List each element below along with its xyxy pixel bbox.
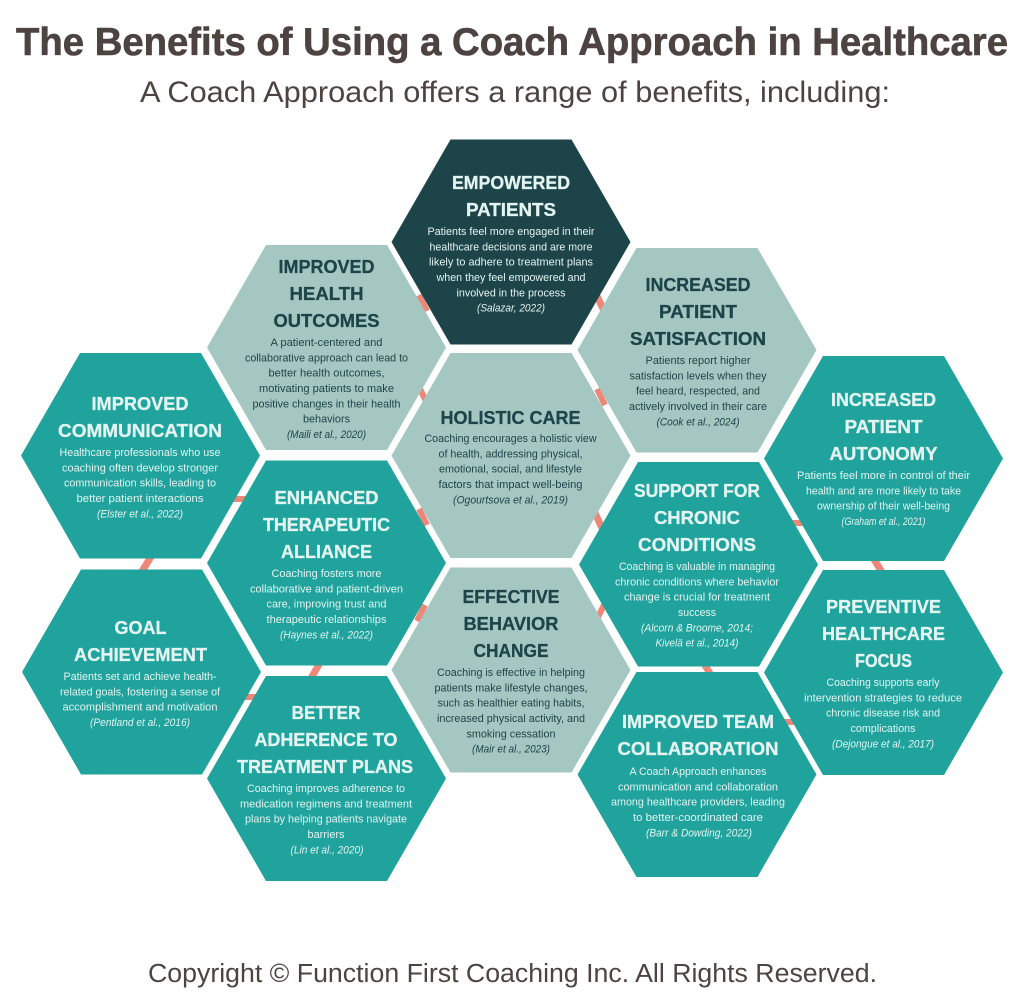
description: Coaching supports early [826, 677, 940, 689]
heading [274, 256, 380, 331]
description: Coaching fosters more [272, 568, 382, 580]
heading: EMPOWERED [452, 172, 570, 193]
panel: enhanced therapeutic alliance [207, 460, 446, 666]
heading [237, 702, 413, 777]
description: satisfaction levels when they [630, 370, 767, 382]
description: increased physical activity, and [437, 713, 585, 725]
panel: increased patient satisfaction [578, 248, 816, 452]
panel: improved communication [21, 353, 260, 558]
description [428, 226, 595, 315]
heading: PATIENT [659, 301, 738, 322]
heading: ENHANCED [274, 487, 378, 508]
description: barriers [308, 829, 345, 841]
description [60, 447, 220, 520]
description: Patients set and achieve health- [64, 671, 217, 683]
heading: COLLABORATION [618, 738, 778, 759]
description: change is crucial for treatment [624, 592, 770, 604]
description: complications [850, 723, 916, 735]
description: (Cook et al., 2024) [656, 416, 740, 428]
heading [822, 596, 945, 671]
description: communication skills, leading to [64, 478, 216, 490]
description: (Salazar, 2022) [477, 303, 545, 315]
hexagon background [207, 460, 446, 666]
description: of health, addressing physical, [438, 448, 582, 460]
description: Coaching is effective in helping [437, 667, 585, 679]
heading: FOCUS [855, 650, 912, 671]
heading [452, 172, 570, 220]
heading: IMPROVED TEAM [622, 711, 774, 732]
hexagon background [22, 570, 261, 774]
description: A Coach Approach enhances [630, 766, 767, 778]
heading: CHRONIC [654, 507, 740, 528]
heading: PREVENTIVE [826, 596, 941, 617]
hexagon background [579, 462, 818, 666]
description: care, improving trust and [266, 599, 386, 611]
hexagon background [578, 248, 816, 452]
hexagon background [207, 676, 446, 881]
description [240, 783, 412, 856]
heading [263, 487, 390, 562]
description: to better-coordinated care [633, 812, 763, 824]
hexagon background [764, 356, 1003, 561]
heading: HOLISTIC CARE [440, 407, 580, 428]
description [250, 568, 403, 641]
description: (Haynes et al., 2022) [280, 629, 373, 641]
panel: support for chronic conditions [579, 462, 818, 666]
description [804, 677, 962, 750]
heading: CONDITIONS [638, 534, 756, 555]
heading [618, 711, 778, 759]
description: smoking cessation [466, 728, 556, 740]
description: (Ogourtsova et al., 2019) [453, 494, 568, 506]
description: (Dejongue et al., 2017) [832, 738, 934, 750]
panel: increased patient autonomy [764, 356, 1003, 561]
description: success [678, 607, 717, 619]
hexagon background [207, 245, 446, 450]
description: plans by helping patients navigate [245, 814, 407, 826]
description: chronic conditions where behavior [615, 576, 779, 588]
description: related goals, fostering a sense of [60, 686, 221, 698]
description: (Pentland et al., 2016) [90, 717, 190, 729]
heading: SATISFACTION [630, 328, 766, 349]
heading: PATIENT [844, 416, 923, 437]
description: ownership of their well-being [817, 501, 950, 513]
description: (Graham et al., 2021) [842, 516, 926, 528]
panel: improved health outcomes [207, 245, 446, 450]
description: therapeutic relationships [266, 614, 387, 626]
description: Patients feel more engaged in their [428, 226, 595, 238]
heading: GOAL [114, 617, 166, 638]
description [424, 433, 597, 506]
description: emotional, social, and lifestyle [439, 464, 582, 476]
heading [630, 274, 766, 349]
heading: COMMUNICATION [58, 420, 222, 441]
hexagon background [392, 568, 630, 772]
heading: ADHERENCE TO [254, 729, 398, 750]
title: The Benefits of Using a Coach Approach in Healthcare [16, 21, 1008, 64]
heading [634, 480, 760, 555]
heading: HEALTHCARE [822, 623, 945, 644]
description: (Elster et al., 2022) [97, 508, 183, 520]
description: health and are more likely to take [806, 485, 961, 497]
description: Kivelä et al., 2014) [656, 638, 738, 650]
heading: THERAPEUTIC [263, 514, 390, 535]
description: better health outcomes, [268, 368, 384, 380]
heading: IMPROVED [92, 393, 188, 414]
description: Patients feel more in control of their [797, 470, 970, 482]
heading [462, 586, 560, 661]
description: involved in the process [456, 287, 566, 299]
description: accomplishment and motivation [62, 702, 218, 714]
description: Healthcare professionals who use [60, 447, 220, 459]
heading: BETTER [292, 702, 360, 723]
heading: BEHAVIOR [464, 613, 558, 634]
heading: AUTONOMY [830, 443, 938, 464]
description: motivating patients to make [259, 383, 394, 395]
heading [74, 617, 208, 665]
description: collaborative and patient-driven [250, 583, 403, 595]
description: healthcare decisions and are more [430, 241, 592, 253]
hexagon background [21, 353, 260, 558]
heading: ALLIANCE [281, 541, 372, 562]
panel: improved team collaboration [578, 672, 816, 877]
heading: TREATMENT PLANS [237, 756, 413, 777]
heading: SUPPORT FOR [634, 480, 760, 501]
hexagon background [392, 140, 630, 344]
description: such as healthier eating habits, [438, 698, 584, 710]
heading: INCREASED [831, 389, 936, 410]
heading: INCREASED [646, 274, 750, 295]
panel: effective behavior change [392, 568, 630, 772]
description: medication regimens and treatment [240, 798, 412, 810]
heading: CHANGE [474, 640, 548, 661]
description: among healthcare providers, leading [611, 797, 785, 809]
description: (Barr & Dowding, 2022) [646, 827, 752, 839]
description [611, 766, 785, 839]
description: A patient-centered and [270, 337, 382, 349]
description: likely to adhere to treatment plans [429, 257, 594, 269]
heading: PATIENTS [466, 199, 556, 220]
panel: preventive healthcare focus [764, 570, 1003, 775]
heading: ACHIEVEMENT [74, 644, 208, 665]
description: intervention strategies to reduce [804, 692, 962, 704]
panel: goal achievement [22, 570, 261, 774]
description: Coaching improves adherence to [247, 783, 405, 795]
hexagon background [392, 353, 630, 558]
heading: IMPROVED [278, 256, 374, 277]
description: Coaching is valuable in managing [619, 561, 775, 573]
hexagon background [578, 672, 816, 877]
description: Coaching encourages a holistic view [424, 433, 597, 445]
hexagon background [764, 570, 1003, 775]
description: actively involved in their care [629, 401, 767, 413]
description: coaching often develop stronger [62, 462, 218, 474]
description: feel heard, respected, and [636, 386, 760, 398]
panel: empowered patients [392, 140, 630, 344]
description [615, 561, 779, 650]
description: communication and collaboration [618, 781, 778, 793]
description: positive changes in their health [252, 398, 400, 410]
heading [830, 389, 938, 464]
description: patients make lifestyle changes, [434, 682, 588, 694]
description: Patients report higher [646, 355, 751, 367]
description [60, 671, 221, 729]
description [629, 355, 767, 428]
description: better patient interactions [76, 493, 204, 505]
description: (Lin et al., 2020) [290, 844, 364, 856]
heading: HEALTH [290, 283, 364, 304]
panel: holistic care [392, 353, 630, 558]
description [245, 337, 408, 441]
subtitle: A Coach Approach offers a range of benefits, including: [140, 76, 890, 109]
description: (Maili et al., 2020) [287, 429, 366, 441]
description: (Mair et al., 2023) [472, 744, 550, 756]
description: (Alcorn & Broome, 2014; [641, 622, 753, 634]
description: collaborative approach can lead to [245, 352, 408, 364]
description: chronic disease risk and [826, 708, 940, 720]
description: when they feel empowered and [436, 272, 586, 284]
description [797, 470, 970, 528]
connector ticks between hexagons [141, 294, 883, 722]
panel: better adherence to treatment plans [207, 676, 446, 881]
description [434, 667, 588, 756]
heading [58, 393, 222, 441]
heading: OUTCOMES [274, 310, 380, 331]
footer copyright: Copyright © Function First Coaching Inc. All Rights Reserved. [148, 960, 877, 988]
description: behaviors [303, 414, 351, 426]
heading: EFFECTIVE [462, 586, 560, 607]
description: factors that impact well-being [438, 479, 582, 491]
